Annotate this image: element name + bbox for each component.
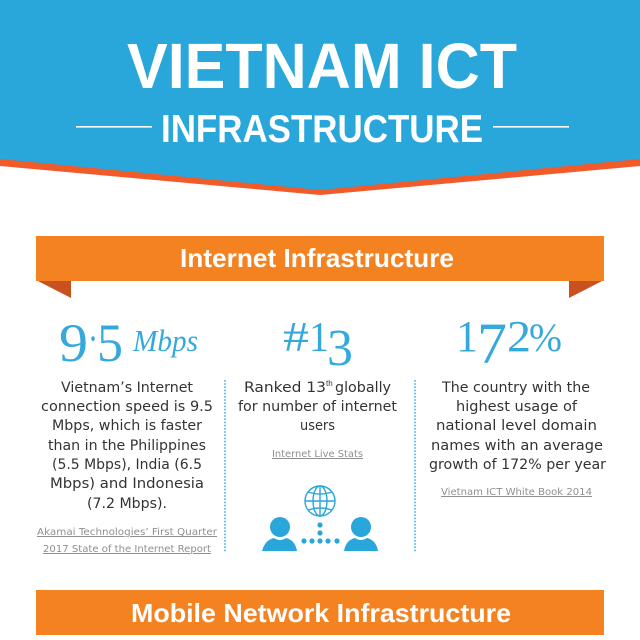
text: rank description: for number of internet bbox=[238, 399, 398, 415]
stat: 9.5 Mbps: Mbps bbox=[132, 323, 198, 358]
text: domain description bbox=[429, 380, 606, 473]
stat: 172%: % bbox=[529, 315, 562, 360]
subtitle: INFRASTRUCTURE bbox=[161, 108, 483, 151]
text: connection speed description bbox=[41, 380, 213, 512]
text: rank description: users bbox=[300, 418, 335, 434]
source: White Book: Vietnam ICT White Book 2014 bbox=[441, 487, 592, 498]
banner: Internet Infrastructure bbox=[36, 236, 604, 298]
stat: 9.5 Mbps: 9 bbox=[59, 313, 88, 373]
title: VIETNAM ICT bbox=[127, 30, 517, 102]
banner: Internet Infrastructure: Internet Infrastructure bbox=[180, 243, 454, 273]
stat: 9.5 Mbps: · bbox=[88, 316, 98, 361]
text: domain description: highest usage of bbox=[456, 399, 578, 415]
text: connection speed description: than in the Philippines bbox=[48, 438, 206, 454]
source: Akamai: 2017 State of the Internet Report bbox=[43, 544, 211, 555]
panel: domain growth bbox=[429, 311, 606, 498]
stat: #13: 1 bbox=[309, 315, 329, 361]
text: domain description: The country with the bbox=[441, 380, 590, 396]
stat: #13: # bbox=[283, 315, 309, 361]
stat: 9.5 Mbps bbox=[59, 313, 198, 373]
source: Akamai: Akamai Technologies’ First Quarter bbox=[37, 527, 218, 538]
text: connection speed description: (5.5 Mbps), India (6.5 bbox=[52, 457, 202, 473]
stat: 172%: 1 bbox=[456, 312, 478, 361]
text: connection speed description: connection speed is 9.5 bbox=[41, 399, 213, 415]
panel: connection speed bbox=[37, 313, 218, 555]
text: connection speed description: Mbps, which is faster bbox=[52, 418, 202, 434]
panel: global rank bbox=[238, 315, 398, 551]
text: rank description bbox=[238, 379, 398, 434]
text: connection speed description: (7.2 Mbps). bbox=[87, 496, 167, 512]
text: rank description: globally bbox=[335, 380, 391, 396]
text: rank description: th bbox=[326, 379, 333, 388]
stat: #13: 3 bbox=[327, 320, 353, 377]
text: domain description: names with an average bbox=[431, 438, 603, 454]
header panel bbox=[0, 0, 640, 195]
banner: Mobile Network Infrastructure: Mobile Network Infrastructure bbox=[131, 598, 511, 628]
stat: 172% bbox=[456, 311, 562, 376]
text: connection speed description: Mbps) and Indonesia bbox=[50, 476, 204, 492]
text: domain description: national level domain bbox=[436, 418, 597, 434]
text: rank description: Ranked 13 bbox=[244, 380, 326, 396]
banner: Mobile Network Infrastructure bbox=[36, 590, 604, 635]
icon: globe and connected users bbox=[262, 486, 378, 551]
source: Akamai bbox=[37, 527, 218, 555]
stat: 172%: 7 bbox=[477, 311, 507, 376]
stat: 172%: 2 bbox=[507, 312, 531, 361]
source: Internet Live Stats: Internet Live Stats bbox=[272, 449, 363, 460]
text: domain description: growth of 172% per year bbox=[429, 457, 606, 473]
stat: 9.5 Mbps: 5 bbox=[97, 313, 123, 373]
stat: #13 bbox=[283, 315, 353, 377]
text: connection speed description: Vietnam’s Internet bbox=[61, 380, 194, 396]
